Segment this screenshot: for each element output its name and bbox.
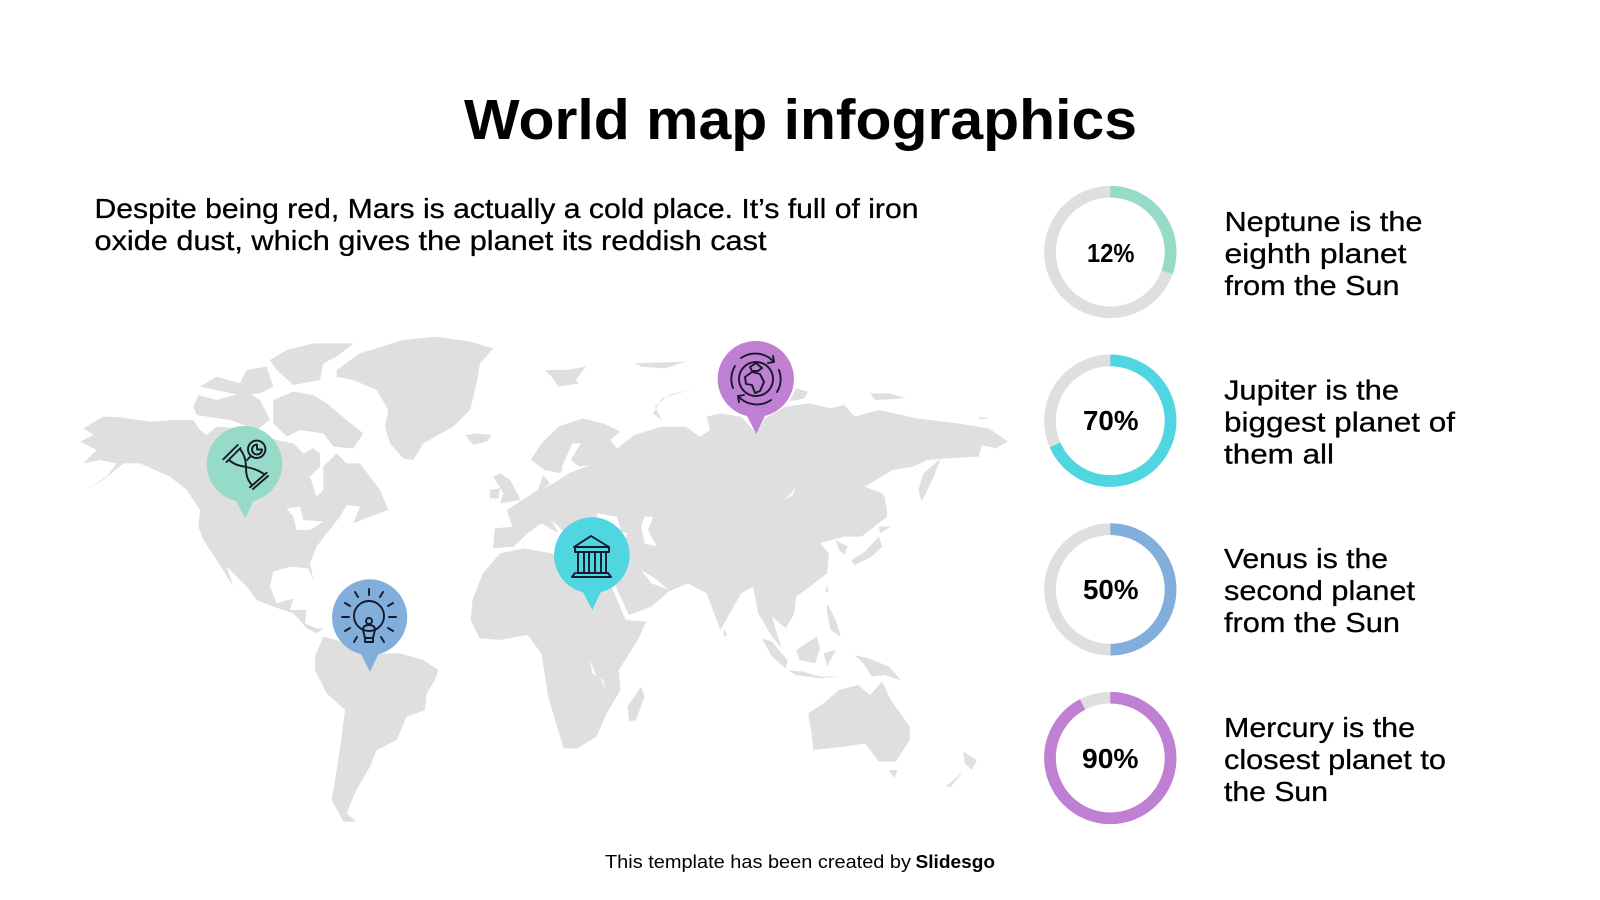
- world map: [80, 337, 1008, 822]
- icon: lightbulb with person: [342, 589, 396, 642]
- donut chart: 90%: [1050, 698, 1171, 818]
- description: Jupiter: biggest planet of: [1224, 406, 1455, 438]
- donut chart: 70%: [1050, 360, 1171, 481]
- pin: turquoise temple: [554, 517, 630, 610]
- stat: 50% Venus: [1050, 529, 1415, 650]
- pin: purple globe: [718, 341, 794, 434]
- description: Venus: second planet: [1224, 575, 1415, 606]
- map: the Americas and Greenland: [80, 337, 493, 822]
- value: 50%: 50%: [1083, 574, 1139, 605]
- description: Mercury: Mercury is the: [1224, 712, 1415, 743]
- pin: blue lightbulb: [332, 579, 407, 672]
- value: 90%: 90%: [1082, 743, 1139, 774]
- stat: 12% Neptune: [1050, 192, 1422, 312]
- description: Venus: [1224, 543, 1415, 638]
- icon: hourglass and speech bubble: [223, 441, 268, 489]
- description: Neptune: [1224, 206, 1422, 301]
- intro text block: Despite being red, Mars is actually a cold place. It’s full of iron: [94, 193, 918, 224]
- description: Venus: Venus is the: [1224, 543, 1388, 574]
- intro text block: [94, 193, 918, 256]
- description: Neptune: from the Sun: [1224, 270, 1400, 301]
- description: Neptune: eighth planet: [1224, 238, 1407, 269]
- description: Neptune: Neptune is the: [1224, 206, 1422, 237]
- pin: teal hourglass: [207, 426, 282, 518]
- footer credit: Slidesgo: [916, 852, 995, 872]
- description: Jupiter: [1224, 374, 1455, 470]
- donut chart: 50%: [1050, 529, 1171, 650]
- map: Europe, Asia, Africa and Oceania: [471, 362, 1008, 787]
- intro text block: oxide dust, which gives the planet its reddish cast: [94, 225, 767, 256]
- icon: temple: [572, 536, 611, 577]
- description: Jupiter: them all: [1224, 438, 1334, 470]
- stat: 70% Jupiter: [1050, 360, 1455, 481]
- description: Venus: from the Sun: [1224, 607, 1400, 638]
- description: Jupiter: Jupiter is the: [1224, 374, 1399, 406]
- footer credit: This template has been created by: [605, 852, 911, 872]
- description: Mercury: closest planet to: [1224, 744, 1446, 775]
- description: Mercury: [1224, 712, 1446, 807]
- title: World map infographics: [464, 88, 1137, 152]
- description: Mercury: the Sun: [1224, 776, 1328, 807]
- icon: globe with arrows: [731, 354, 781, 404]
- value: 70%: 70%: [1083, 405, 1139, 436]
- value: 12%: 12%: [1087, 238, 1134, 268]
- donut chart: 12%: [1050, 192, 1171, 312]
- stat: 90% Mercury: [1050, 698, 1446, 818]
